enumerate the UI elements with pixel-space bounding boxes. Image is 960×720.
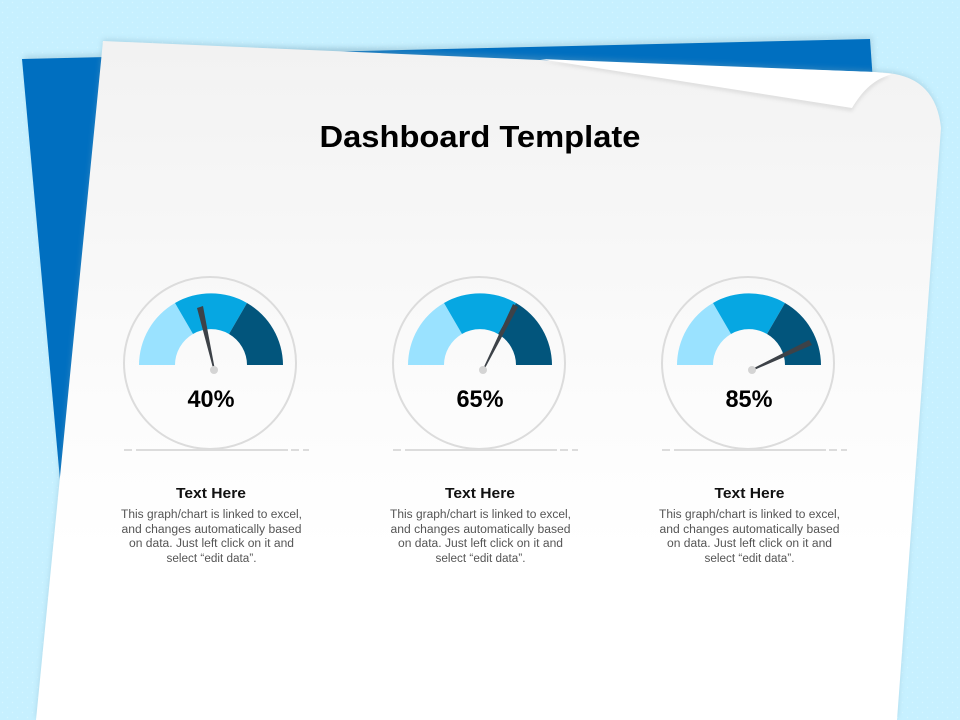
gauge ring xyxy=(393,277,565,449)
baseline xyxy=(124,449,309,451)
gauge segments xyxy=(677,293,821,365)
value: 40% xyxy=(188,386,234,413)
gauge 2 caption: Text Here xyxy=(445,485,515,502)
baseline xyxy=(393,449,578,451)
gauge ring xyxy=(662,277,834,449)
needle xyxy=(482,304,518,370)
gauge 3 caption: on data. Just left click on it and xyxy=(667,538,832,550)
gauge segments xyxy=(408,293,552,365)
value: 65% xyxy=(456,386,504,413)
gauge segments xyxy=(139,293,283,365)
gauge 1 xyxy=(124,277,309,450)
gauge 3 caption: Text Here xyxy=(714,485,784,502)
gauge 2 caption xyxy=(390,485,571,565)
needle pivot xyxy=(479,366,487,374)
gauge 1 caption xyxy=(121,485,302,565)
gauge 2 caption: and changes automatically based xyxy=(390,524,570,536)
needle pivot xyxy=(748,366,756,374)
title: Dashboard Template xyxy=(320,119,640,154)
gauge 1 caption: This graph/chart is linked to excel, xyxy=(121,509,302,521)
gauge 2 xyxy=(393,277,578,450)
gauge 3 caption xyxy=(659,485,840,565)
gauge 3 caption: This graph/chart is linked to excel, xyxy=(659,509,840,521)
gauge 1 caption: select “edit data”. xyxy=(166,553,256,565)
gauge 3 xyxy=(662,277,847,450)
baseline xyxy=(662,449,847,451)
gauge ring xyxy=(124,277,296,449)
gauge 2 caption: on data. Just left click on it and xyxy=(398,538,563,550)
needle xyxy=(752,340,812,370)
needle pivot xyxy=(210,366,218,374)
value: 85% xyxy=(726,386,772,413)
gauge 3 caption: select “edit data”. xyxy=(704,553,794,565)
page curl xyxy=(540,59,892,112)
gauge 2 caption: This graph/chart is linked to excel, xyxy=(390,509,571,521)
blue back sheet xyxy=(22,36,875,480)
gauge 1 caption: Text Here xyxy=(176,485,246,502)
needle xyxy=(197,306,215,370)
gauge 3 caption: and changes automatically based xyxy=(660,524,840,536)
gauge 2 caption: select “edit data”. xyxy=(436,553,526,565)
gauge 1 caption: on data. Just left click on it and xyxy=(129,538,294,550)
gauge 1 caption: and changes automatically based xyxy=(122,524,302,536)
